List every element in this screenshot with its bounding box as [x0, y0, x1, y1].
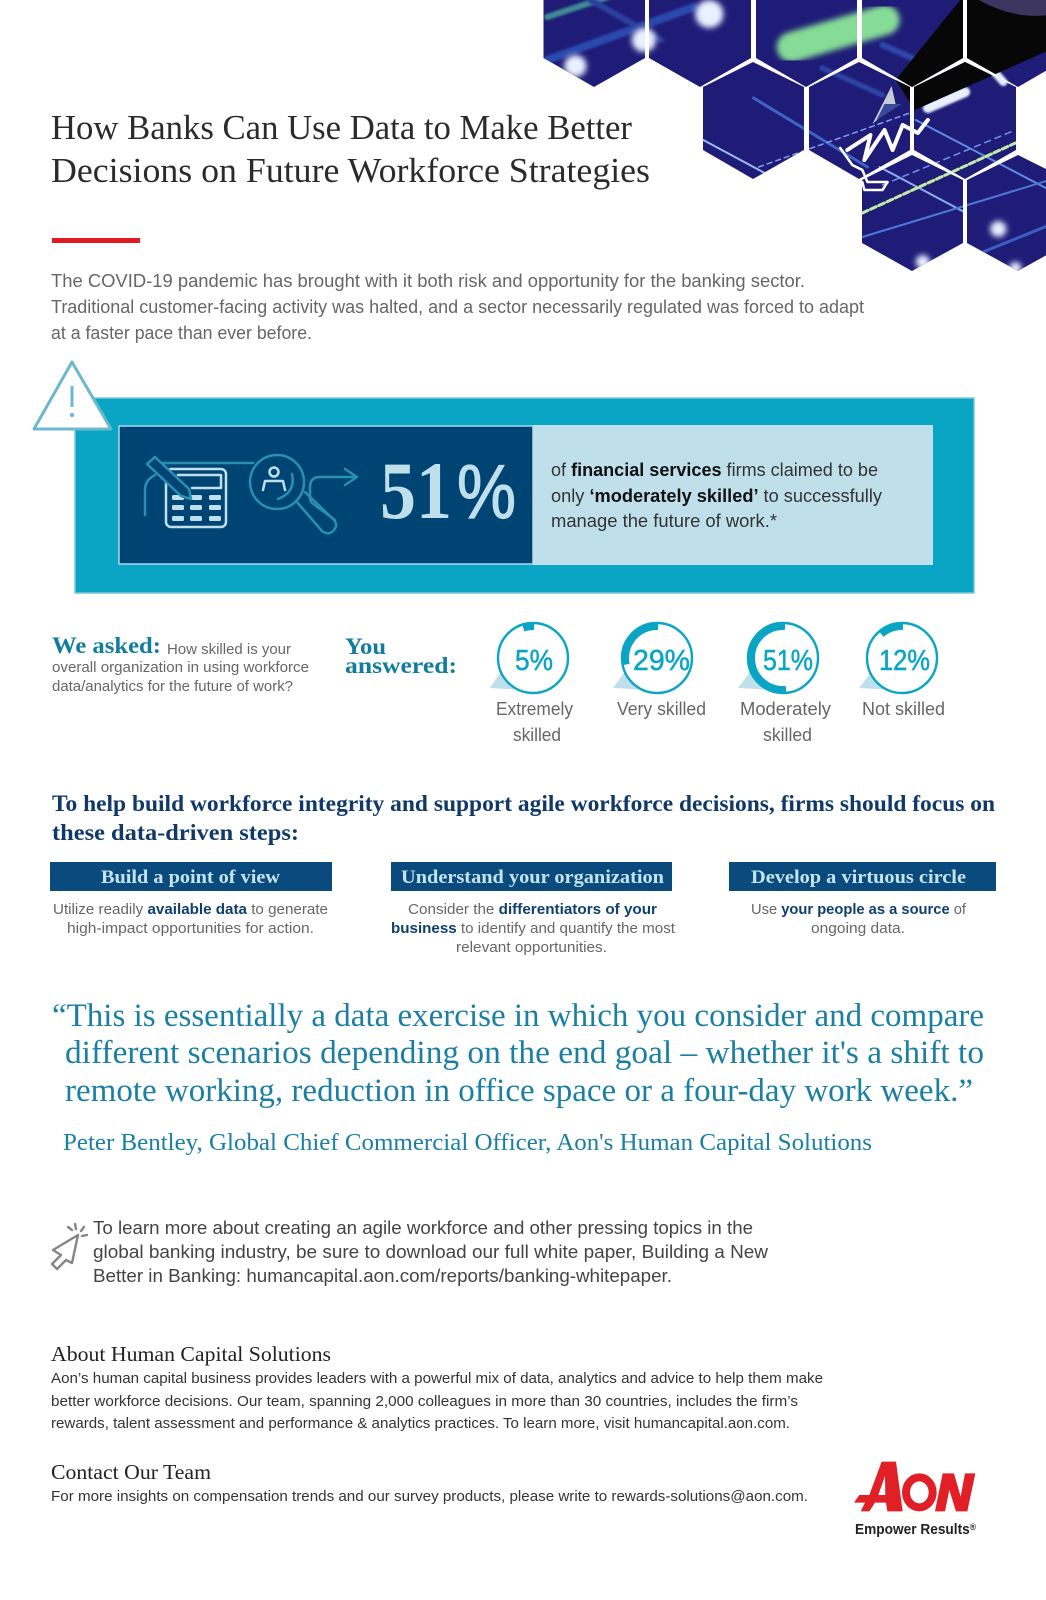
about section: better workforce decisions. Our team, spanning 2,000 colleagues in more than 30 countries, includes the firm’s [51, 1394, 798, 1410]
step: develop a virtuous circle: Use your people as a source of [751, 901, 967, 918]
contact section: For more insights on compensation trends and our survey products, please write to rewards-solutions@aon.com. [51, 1489, 808, 1505]
call to action text: global banking industry, be sure to download our full white paper, Building a New [93, 1241, 769, 1262]
step: understand your organization [391, 862, 676, 956]
step: understand your organization: business to identify and quantify the most [391, 920, 676, 937]
about section: rewards, talent assessment and performance & analytics practices. To learn more, visit humancapital.aon.com. [51, 1416, 790, 1432]
pull quote: remote working, reduction in office space or a four-day work week.” [65, 1073, 973, 1109]
call to action text: To learn more about creating an agile workforce and other pressing topics in the [93, 1217, 753, 1238]
chart: 12 percent not skilled [859, 623, 945, 719]
step: understand your organization: Understand your organization [401, 867, 664, 888]
title: Decisions on Future Workforce Strategies [51, 151, 650, 190]
logo: Aon Empower Results [854, 1462, 976, 1538]
chart: 51 percent moderately skilled: Moderately [740, 698, 832, 719]
about section [51, 1342, 823, 1432]
stat number [380, 445, 516, 536]
chart: 5 percent extremely skilled [490, 623, 574, 745]
step: understand your organization: Consider the differentiators of your [408, 901, 657, 918]
chart: 29 percent very skilled: Very skilled [617, 698, 706, 719]
pull quote: different scenarios depending on the end goal – whether it's a shift to [65, 1035, 984, 1071]
chart: 5 percent extremely skilled: skilled [513, 724, 561, 745]
contact section [51, 1460, 808, 1505]
step: build a point of view [50, 862, 332, 937]
steps heading: To help build workforce integrity and support agile workforce decisions, firms should focus on [52, 791, 995, 816]
step: build a point of view: Build a point of view [101, 867, 280, 888]
dark stat block [119, 426, 533, 564]
intro paragraph: The COVID-19 pandemic has brought with it both risk and opportunity for the banking sector. [51, 270, 805, 291]
survey answer heading: answered: [345, 653, 457, 678]
stat description [551, 459, 883, 531]
call to action text [93, 1217, 769, 1286]
about section: About Human Capital Solutions [51, 1342, 331, 1366]
icon: calculator, magnifier and arrow [145, 455, 357, 533]
step: build a point of view: Utilize readily available data to generate [53, 901, 328, 918]
chart: 5 percent extremely skilled: Extremely [496, 698, 574, 719]
image: hexagon mosaic of financial data chart and pen [540, 0, 1046, 280]
stat description: of financial services firms claimed to be [551, 459, 878, 480]
stat number: 51 [380, 445, 452, 536]
intro paragraph [51, 270, 864, 343]
survey question: data/analytics for the future of work? [52, 678, 293, 695]
step: develop a virtuous circle: Develop a virtuous circle [751, 867, 966, 888]
chart: 12 percent not skilled: Not skilled [862, 698, 945, 719]
chart: 29 percent very skilled: 29% [633, 645, 690, 677]
intro paragraph: Traditional customer-facing activity was halted, and a sector necessarily regulated was forced to adapt [51, 296, 864, 317]
survey question: How skilled is your [167, 641, 291, 658]
survey answer heading [345, 634, 457, 678]
steps heading: these data-driven steps: [52, 820, 299, 845]
light description block [533, 425, 933, 565]
survey answer heading: You [345, 634, 386, 659]
steps heading [52, 791, 995, 845]
stat description: manage the future of work.* [551, 510, 777, 531]
chart: 51 percent moderately skilled: skilled [763, 724, 812, 745]
pull quote [52, 998, 984, 1109]
logo: Aon Empower Results: ® [970, 1522, 976, 1532]
chart: 29 percent very skilled [613, 623, 706, 719]
chart: 5 percent extremely skilled: 5% [515, 645, 553, 677]
chart: 51 percent moderately skilled [738, 623, 832, 745]
call to action text: Better in Banking: humancapital.aon.com/reports/banking-whitepaper. [93, 1265, 672, 1286]
pull quote: “This is essentially a data exercise in which you consider and compare [52, 998, 984, 1034]
contact section: Contact Our Team [51, 1460, 211, 1484]
survey question: overall organization in using workforce [52, 659, 309, 676]
chart: 12 percent not skilled: 12% [879, 645, 930, 677]
step: understand your organization: relevant opportunities. [456, 939, 607, 956]
survey question [52, 633, 309, 695]
quote attribution: Peter Bentley, Global Chief Commercial Officer, Aon's Human Capital Solutions [63, 1130, 872, 1156]
chart: 51 percent moderately skilled: 51% [763, 645, 813, 677]
step: develop a virtuous circle: ongoing data. [811, 920, 905, 937]
logo: Aon Empower Results: Empower Results [855, 1522, 977, 1538]
red accent rule [52, 238, 140, 243]
title: How Banks Can Use Data to Make Better [51, 108, 632, 147]
title [51, 108, 650, 190]
survey question: We asked: [52, 633, 161, 658]
panel: 51 percent stat [75, 398, 974, 593]
stat description: only ‘moderately skilled’ to successfully [551, 485, 883, 506]
stat number: % [457, 450, 516, 535]
icon: cursor click [52, 1224, 87, 1269]
intro paragraph: at a faster pace than ever before. [51, 322, 312, 343]
about section: Aon’s human capital business provides leaders with a powerful mix of data, analytics and advice to help them make [51, 1371, 823, 1387]
step: build a point of view: high-impact opportunities for action. [67, 920, 314, 937]
step: develop a virtuous circle [729, 862, 996, 937]
icon: warning triangle [34, 362, 111, 429]
